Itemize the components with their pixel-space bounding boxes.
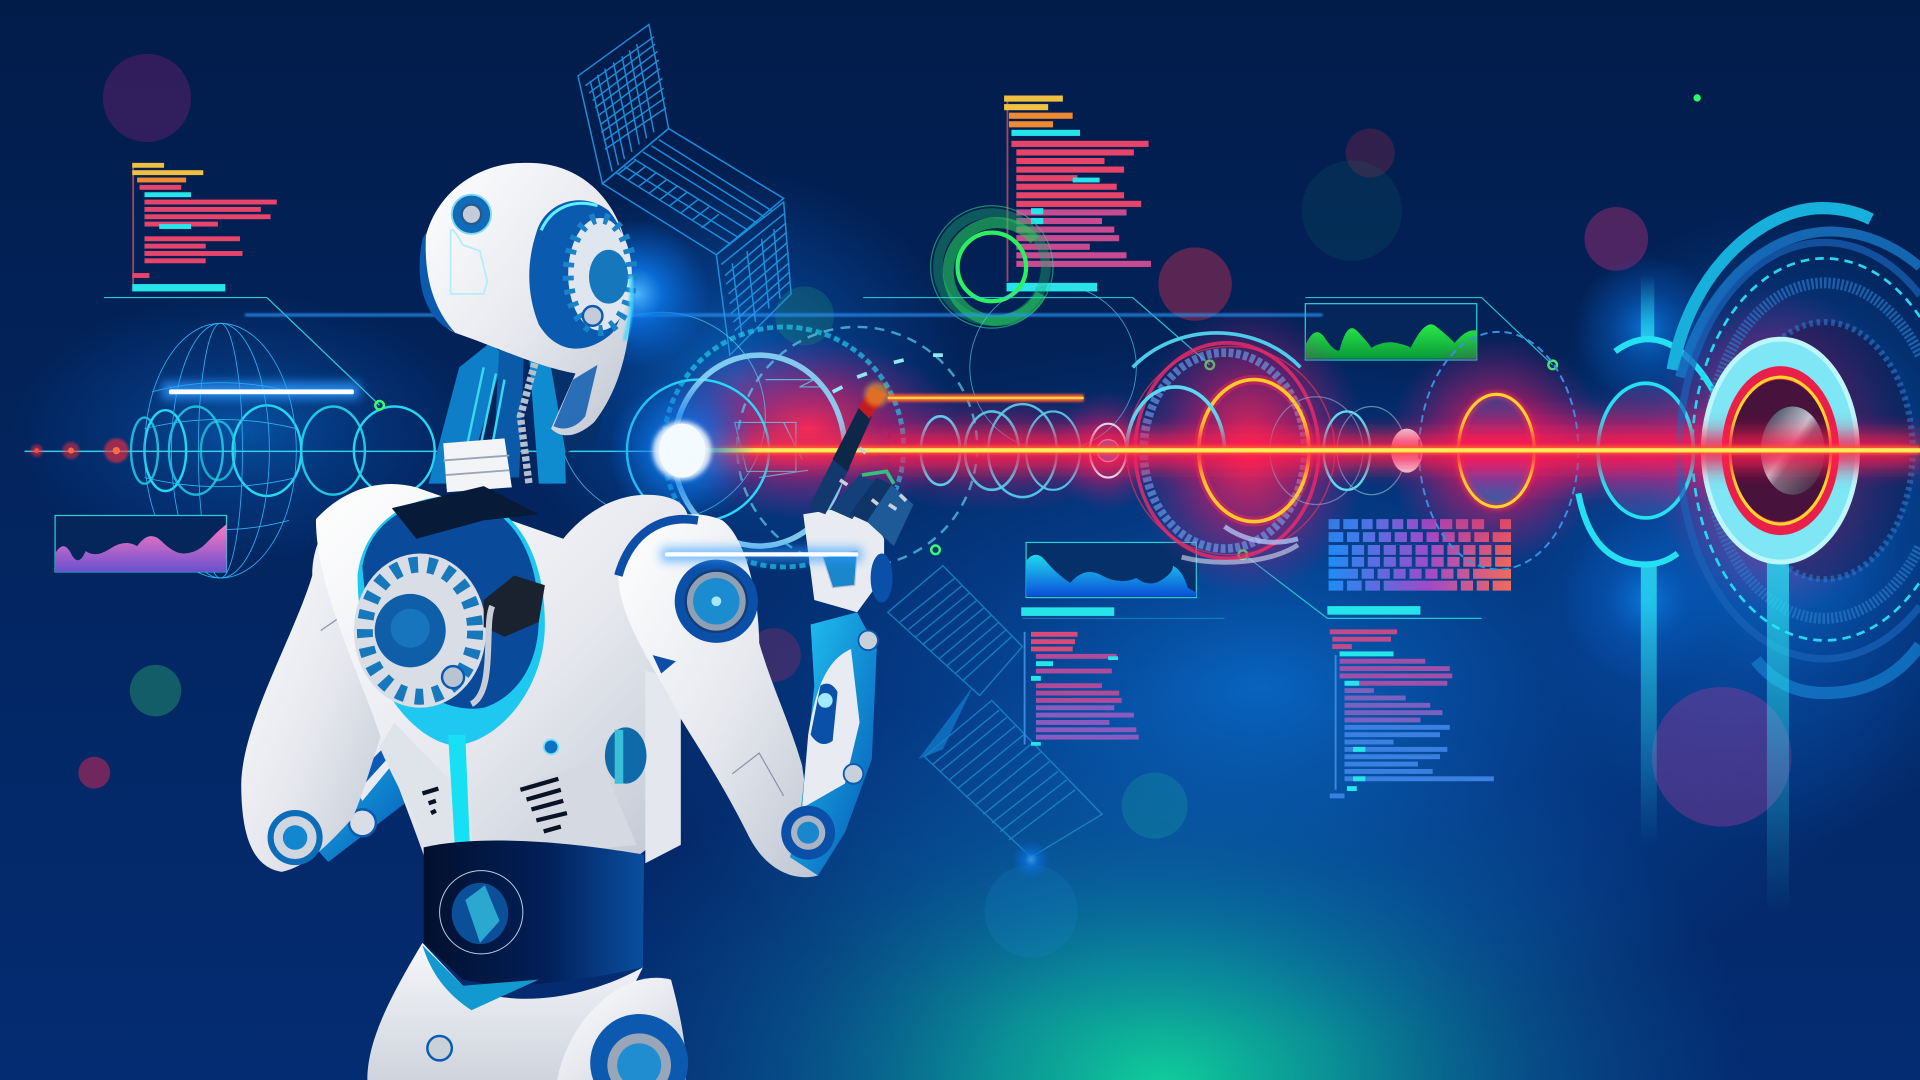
large red target ring cluster <box>1127 333 1406 562</box>
target rings far right <box>1673 208 1920 693</box>
pink area chart <box>55 516 227 572</box>
keyboard panel <box>1329 519 1511 591</box>
green area chart <box>1305 304 1477 360</box>
pelvis and hip <box>367 943 688 1080</box>
keyboard caption bar <box>1327 606 1420 615</box>
top centre code block <box>1004 96 1151 291</box>
lower centre code block <box>1024 632 1139 746</box>
main lens target <box>1703 339 1858 562</box>
cyan vertical bars <box>1641 276 1657 845</box>
far arm forearm <box>291 730 407 862</box>
callout lines <box>104 298 1557 618</box>
robot <box>241 163 913 1080</box>
neck mechanics <box>429 343 610 492</box>
near upper arm <box>605 514 818 877</box>
far shoulder and arm <box>241 492 392 872</box>
chest mechanism <box>354 486 545 857</box>
decorative bokeh circles <box>78 54 1791 958</box>
white lens <box>1391 429 1423 473</box>
cyan vertical bar right <box>1767 557 1789 912</box>
forearm and hand <box>781 382 913 876</box>
white highlight bars <box>162 382 862 562</box>
lower right code block <box>1330 629 1494 798</box>
wireframe panels bottom <box>888 566 1102 879</box>
green ring gauge <box>931 206 1053 328</box>
wireframe panels top <box>578 24 791 355</box>
dashed orbit <box>1419 332 1578 569</box>
left code block <box>132 163 277 291</box>
glowing orb <box>563 220 756 524</box>
red and yellow oval lens <box>1458 394 1534 507</box>
left lens rings <box>131 323 435 578</box>
centre interface rings near finger <box>557 284 1136 567</box>
cyan open ring <box>1578 339 1717 564</box>
big glow behind lenses <box>655 255 1904 686</box>
blue area chart <box>1021 542 1196 616</box>
waist <box>424 841 644 985</box>
torso <box>316 484 690 864</box>
laser beam <box>24 313 1920 468</box>
head <box>420 163 632 435</box>
